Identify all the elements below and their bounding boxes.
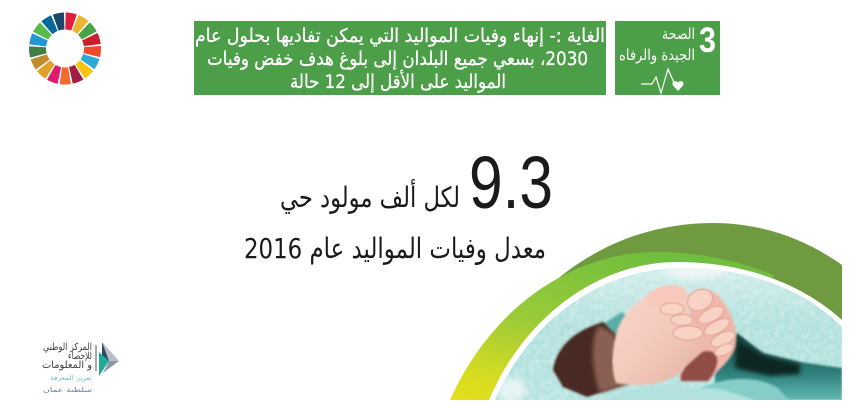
logo text: centre name: و المعلومات: [42, 360, 92, 371]
text: target line 3: المواليد على الأقل إلى 12 حالة: [290, 70, 506, 94]
text: target line 1: الغاية :- إنهاء وفيات المواليد التي يمكن تفاديها بحلول عام: [195, 25, 605, 48]
logo mark: [99, 342, 119, 376]
arc: dark green band: [545, 223, 842, 340]
logo: National Centre for Statistics and Information: [42, 342, 119, 394]
dark gap right: [715, 333, 842, 400]
text: goal name line 1: الصحة: [662, 25, 695, 43]
text: goal number: 3: [699, 21, 716, 60]
text: neonatal mortality rate 2016: معدل وفيات المواليد عام 2016: [244, 232, 546, 265]
text: goal name line 2: الجيدة والرفاه: [619, 46, 695, 64]
logo text: centre name: للإحصاء: [68, 351, 92, 362]
text: target line 2: 2030، بسعي جميع البلدان إلى بلوغ هدف خفض وفيات: [207, 48, 588, 71]
icon: heartbeat with heart: [641, 69, 684, 93]
logo text: centre name: [42, 342, 92, 371]
photo: baby feet in teal blanket: [490, 262, 845, 402]
text: per thousand live births: لكل ألف مولود حي: [280, 178, 460, 214]
text: headline figure: 9.3: [469, 141, 553, 224]
panel: target description: [194, 21, 606, 95]
logo text: teal tagline: تعزيز المعرفة: [50, 374, 92, 382]
arc: white separator: [489, 262, 842, 400]
left foot: [612, 285, 705, 385]
blanket front: [606, 385, 756, 400]
teal shadow beside foot: [604, 311, 626, 336]
toes: [647, 285, 736, 357]
photo banner: baby feet inside green arcs: [450, 223, 845, 402]
panel: SDG goal 3 badge: [615, 21, 720, 95]
logo text: Oman: سلطنة عمان: [43, 386, 92, 394]
icon: SDG colour wheel: [26, 10, 104, 87]
dark gap left: [553, 322, 630, 397]
logo text: centre name: المركز الوطني: [43, 342, 92, 353]
arc: light green gradient band: [450, 252, 775, 400]
right foot: [680, 289, 736, 381]
